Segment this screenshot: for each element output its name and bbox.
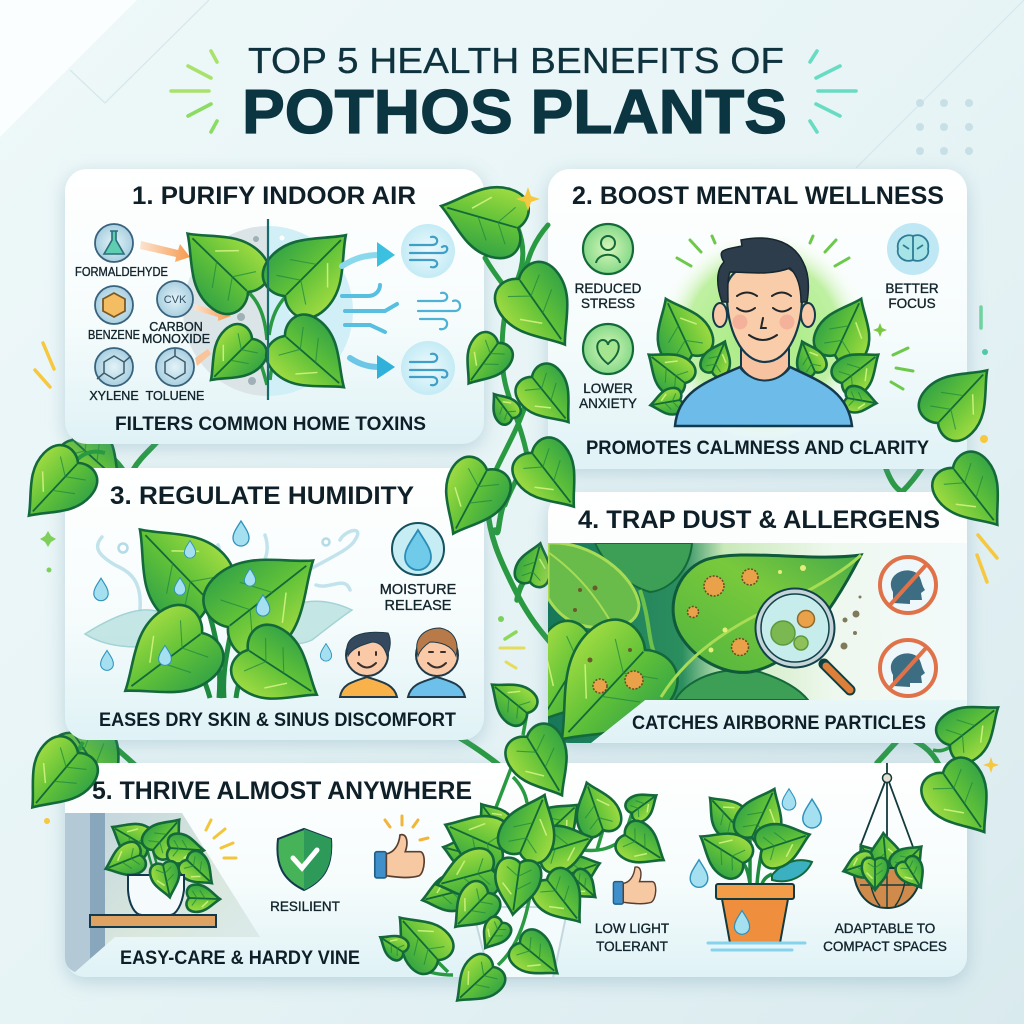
lower anxiety label (579, 381, 637, 411)
decorative sparkles (35, 187, 999, 824)
compact spaces label: ADAPTABLE TO (835, 921, 935, 936)
moisture label: RELEASE (385, 598, 452, 614)
background vines behind panels (95, 442, 943, 777)
plant stems (403, 713, 632, 975)
dust particles (840, 596, 862, 650)
translucent background leaves (85, 601, 352, 647)
reduced stress icon (583, 224, 633, 274)
panel: purify indoor air (65, 169, 484, 444)
top leaves (480, 669, 542, 731)
mist circles (118, 538, 330, 621)
vine stems (485, 225, 548, 505)
water drops (94, 521, 332, 670)
toluene label: TOLUENE (146, 389, 204, 403)
panel 3 caption: EASES DRY SKIN & SINUS DISCOMFORT (99, 710, 456, 731)
toluene icon (156, 348, 194, 386)
panel 5 heading: 5. THRIVE ALMOST ANYWHERE (92, 777, 472, 805)
lower anxiety label: LOWER (583, 381, 633, 396)
moisture icon (392, 523, 444, 575)
central climbing vine (425, 172, 597, 548)
carbon monoxide label: MONOXIDE (142, 332, 210, 346)
star (873, 323, 887, 337)
title (171, 40, 856, 147)
carbon monoxide icon (157, 281, 193, 317)
central potted pothos (374, 669, 675, 1016)
panel: boost mental wellness (548, 169, 967, 469)
orange toxin arrows (140, 241, 231, 366)
ears (713, 303, 815, 327)
title line 2: POTHOS PLANTS (242, 78, 787, 147)
reduced stress label (575, 281, 642, 311)
wind icon top (401, 224, 455, 278)
green glow (658, 230, 868, 440)
child left (340, 632, 397, 697)
title sparkle left (171, 51, 217, 132)
panel 1 caption: FILTERS COMMON HOME TOXINS (115, 414, 426, 435)
white pot (472, 907, 568, 978)
panel 4 card (548, 492, 967, 743)
panel: regulate humidity (65, 468, 484, 740)
panel 5 card (65, 763, 967, 977)
hair (718, 238, 808, 302)
panel 2 caption: PROMOTES CALMNESS AND CLARITY (586, 438, 929, 459)
reduced stress label: REDUCED (575, 281, 642, 296)
panel 5 left caption: EASY-CARE & HARDY VINE (120, 948, 360, 969)
lower anxiety label: ANXIETY (579, 396, 637, 411)
wind icon bottom (401, 341, 455, 395)
back leaves (42, 417, 557, 815)
shelf (90, 915, 216, 927)
benzene icon (95, 286, 133, 324)
carbon monoxide label: CARBON (149, 320, 203, 334)
resilient label: RESILIENT (270, 899, 340, 914)
no breathing dust icon top (880, 557, 936, 613)
room scene (65, 813, 262, 978)
humidity plant (100, 500, 342, 725)
vine leaves (425, 172, 597, 548)
left side vine leaves (6, 437, 105, 827)
resilient shield (277, 829, 331, 890)
panel 3 card (65, 468, 484, 740)
carbon monoxide icon: CVK (164, 294, 187, 306)
panel 4 heading: 4. TRAP DUST & ALLERGENS (578, 506, 940, 534)
sun rays (206, 820, 236, 858)
shirt (675, 367, 852, 426)
right side vine leaves (911, 349, 1022, 850)
person with plants (636, 230, 913, 440)
wind icon middle (418, 293, 460, 329)
panel 3 heading: 3. REGULATE HUMIDITY (110, 482, 414, 510)
panel 4 caption: CATCHES AIRBORNE PARTICLES (632, 713, 926, 734)
reduced stress label: STRESS (581, 296, 635, 311)
chemical icons (75, 224, 210, 403)
lower leaves (474, 914, 514, 955)
panel: thrive almost anywhere (65, 763, 967, 978)
face (727, 262, 802, 362)
panel: trap dust and allergens (540, 489, 975, 756)
better focus label: BETTER (885, 281, 939, 296)
facial features (737, 292, 791, 340)
xylene icon (95, 348, 133, 386)
orange pot plant (689, 779, 821, 950)
plant foliage back (469, 795, 517, 845)
cheeks (732, 314, 794, 330)
clean air arrows (342, 242, 397, 379)
air purification circle (183, 226, 353, 396)
rays (677, 236, 913, 389)
close-up leaf image (548, 543, 967, 743)
hanging basket (839, 763, 932, 908)
title line 1: TOP 5 HEALTH BENEFITS OF (248, 40, 784, 81)
xylene label: XYLENE (89, 389, 139, 403)
no breathing dust icon bottom (880, 640, 936, 696)
child right (408, 628, 465, 697)
plant foliage front (434, 800, 517, 877)
title sparkle right (810, 51, 856, 132)
thumbs up icon (375, 816, 428, 878)
panel 1 card (65, 169, 484, 444)
better focus icon (887, 223, 939, 275)
magnifier (756, 588, 850, 690)
carbon monoxide label (142, 320, 210, 346)
compact spaces label: COMPACT SPACES (823, 939, 947, 954)
low light label (595, 921, 669, 954)
mist swirls (98, 531, 358, 610)
compact spaces label (823, 921, 947, 954)
right trailing leaves (566, 776, 625, 841)
formaldehyde icon (95, 224, 133, 262)
moisture label (380, 582, 457, 614)
lower anxiety icon (583, 324, 633, 374)
side leaves (636, 287, 891, 418)
low light label: LOW LIGHT (595, 921, 669, 936)
moisture label: MOISTURE (380, 582, 457, 598)
background decoration (0, 0, 1024, 168)
better focus label (885, 281, 939, 311)
shelf plant (100, 808, 222, 915)
plant leaves (162, 207, 373, 413)
panel 2 heading: 2. BOOST MENTAL WELLNESS (572, 182, 944, 210)
low light label: TOLERANT (596, 939, 668, 954)
low light thumb (613, 867, 656, 904)
benzene label: BENZENE (88, 328, 140, 342)
panel 2 card (548, 169, 967, 469)
better focus label: FOCUS (888, 296, 936, 311)
formaldehyde label: FORMALDEHYDE (75, 265, 168, 279)
panel 1 heading: 1. PURIFY INDOOR AIR (132, 182, 416, 210)
neck (741, 345, 789, 380)
